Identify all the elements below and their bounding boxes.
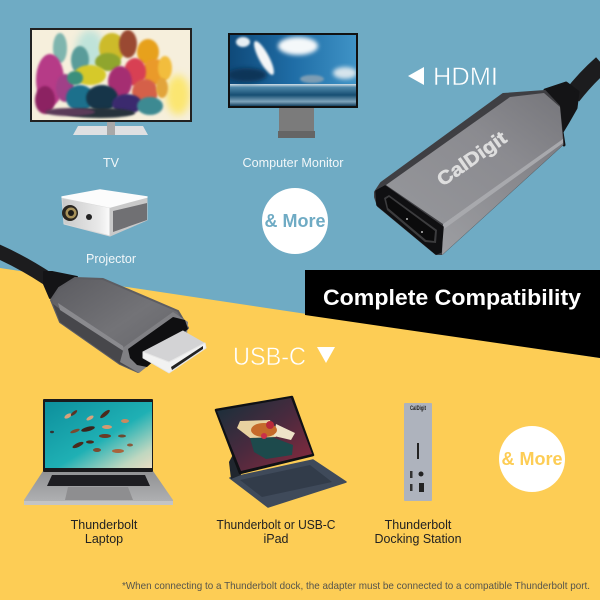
badge: and more (yellow)	[499, 426, 565, 492]
badge: and more (yellow): & More	[502, 449, 562, 469]
label: projector: Projector	[86, 252, 136, 266]
label: Thunderbolt laptop: Laptop	[85, 532, 123, 546]
icon: Thunderbolt docking station	[404, 403, 432, 501]
label: Thunderbolt or USB-C iPad: iPad	[263, 532, 289, 546]
icon: iPad with keyboard	[216, 397, 346, 507]
USB-C connector	[0, 251, 206, 373]
label: Thunderbolt or USB-C iPad	[216, 518, 336, 546]
label: Thunderbolt laptop: Thunderbolt	[71, 518, 138, 532]
badge: and more (blue)	[262, 188, 328, 254]
icon: Thunderbolt laptop	[24, 399, 173, 505]
icon: TV	[30, 28, 192, 135]
icon: projector	[62, 190, 147, 236]
title banner	[305, 270, 600, 358]
badge: and more (blue): & More	[264, 211, 326, 231]
label: Thunderbolt docking station: Thunderbolt	[385, 518, 452, 532]
label: TV: TV	[103, 156, 120, 170]
label: Thunderbolt docking station	[374, 518, 462, 546]
title text: Complete Compatibility	[323, 285, 582, 310]
label: Thunderbolt laptop	[71, 518, 138, 546]
heading: USB-C: USB-C	[233, 343, 306, 371]
label: Thunderbolt or USB-C iPad: Thunderbolt or USB-C	[216, 518, 336, 532]
heading: HDMI: HDMI	[433, 63, 498, 91]
icon: computer monitor	[227, 33, 358, 138]
background: yellow lower area	[0, 268, 600, 600]
HDMI adapter	[375, 64, 600, 255]
label: computer monitor: Computer Monitor	[242, 156, 344, 170]
dock logo: CalDigit	[410, 406, 426, 412]
label: Thunderbolt docking station: Docking Station	[374, 532, 462, 546]
logo: CalDigit: CalDigit	[433, 127, 512, 191]
